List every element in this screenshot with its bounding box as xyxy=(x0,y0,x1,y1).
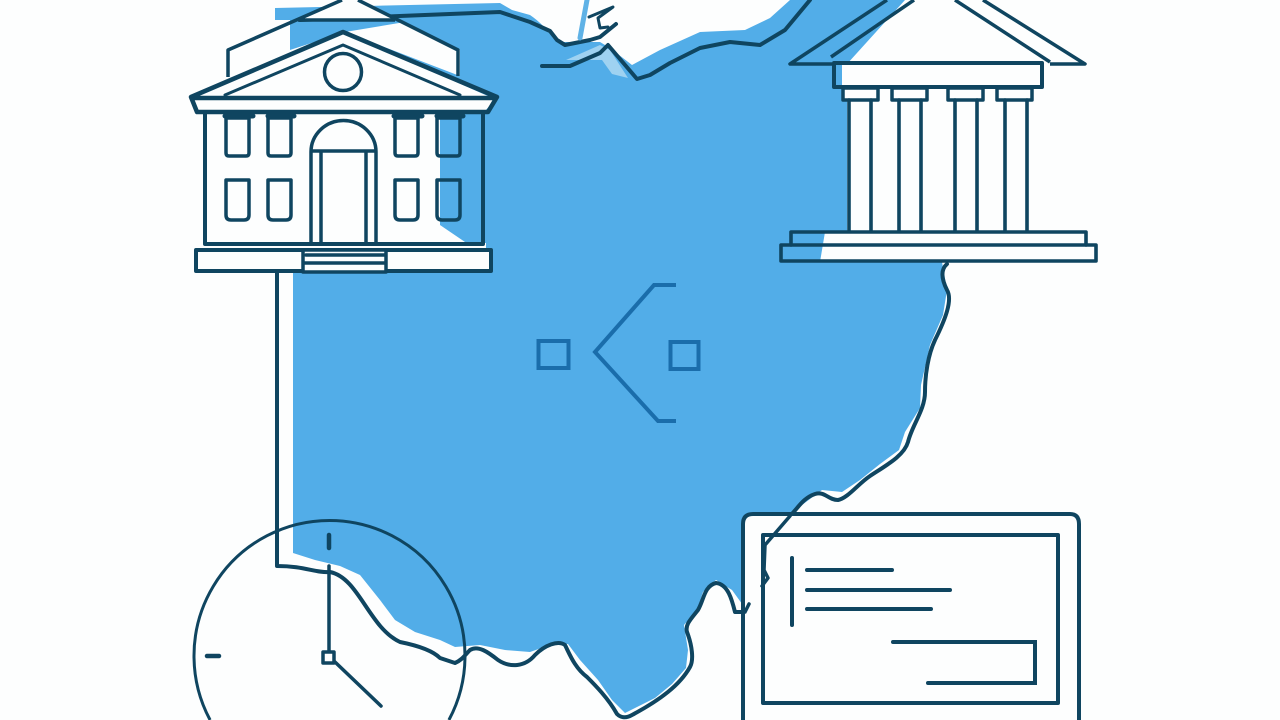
bank: column capitals xyxy=(843,88,1032,100)
bracketed text box on screen xyxy=(893,642,1035,683)
bank: entablature outline xyxy=(834,63,1042,87)
right node xyxy=(670,342,698,369)
courthouse: upper windows xyxy=(226,118,460,156)
courthouse: pediment xyxy=(191,32,497,112)
bank: upper step xyxy=(791,232,1086,245)
bank: white step fill xyxy=(821,233,1095,260)
courthouse: steps xyxy=(303,250,386,272)
coastline outline: northern border xyxy=(300,0,810,79)
left node xyxy=(538,341,568,368)
courthouse: round window xyxy=(324,54,362,90)
monitor screen xyxy=(763,535,1058,703)
icon: monitor with text panel xyxy=(735,514,1079,720)
clock face xyxy=(194,520,465,720)
lake inlet highlight xyxy=(566,45,628,78)
bank: entablature xyxy=(842,65,1040,85)
bank: lower step xyxy=(781,245,1096,261)
bank: roof lines xyxy=(790,0,1085,64)
river inlet xyxy=(580,0,587,38)
minute hand xyxy=(327,566,331,652)
state map: blue fill xyxy=(275,0,947,713)
icon: classical bank with columns xyxy=(781,0,1096,261)
courthouse: inner pediment xyxy=(225,45,460,95)
courthouse: base plinth xyxy=(196,250,491,271)
center pin xyxy=(323,652,334,663)
lake fork strokes xyxy=(589,7,613,28)
clock ticks xyxy=(207,535,329,656)
courthouse: lintels xyxy=(225,114,463,118)
courthouse: upper roof xyxy=(228,0,458,77)
monitor frame xyxy=(743,514,1079,720)
coastline outline: east and south border xyxy=(277,264,949,717)
courthouse: arched door xyxy=(311,121,376,242)
text lines on screen xyxy=(792,558,950,625)
coast overlap on screen xyxy=(735,516,790,612)
courthouse: lower windows xyxy=(226,180,460,220)
hour hand xyxy=(335,662,381,706)
icon: courthouse with dome roof xyxy=(190,0,497,272)
icon: clock xyxy=(194,520,465,720)
courthouse: walls xyxy=(205,113,483,244)
bank: white pediment fill xyxy=(847,0,1043,64)
bank: columns xyxy=(849,100,1027,231)
branching chevron xyxy=(595,285,676,421)
courthouse: white facade fill xyxy=(190,0,495,250)
center diagram: branching symbol xyxy=(538,285,698,421)
